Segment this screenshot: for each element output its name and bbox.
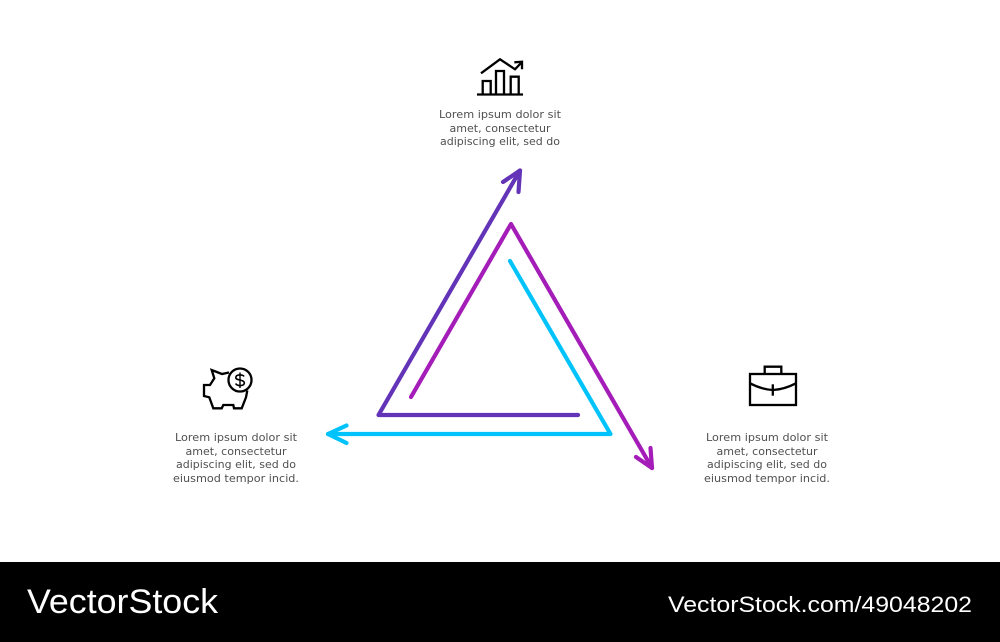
text block: left: Lorem ipsum dolor sit xyxy=(175,432,297,444)
text block: right: amet, consectetur xyxy=(716,446,818,458)
text block: top xyxy=(439,109,561,148)
icon: piggy bank with dollar coin xyxy=(204,368,252,408)
text block: right xyxy=(704,432,830,485)
arrow: magenta, pointing down right xyxy=(411,224,652,468)
footer band xyxy=(0,562,1000,642)
text block: left: amet, consectetur xyxy=(186,446,287,458)
arrow: violet, pointing up xyxy=(378,170,578,415)
icon: bar chart with rising arrow xyxy=(477,59,523,94)
footer logo text: VectorStock xyxy=(27,583,219,621)
text block: left: eiusmod tempor incid. xyxy=(173,473,299,485)
text block: right: Lorem ipsum dolor sit xyxy=(706,432,828,444)
arrow: cyan, pointing left xyxy=(328,261,610,443)
text block: right: eiusmod tempor incid. xyxy=(704,473,830,485)
icon: briefcase xyxy=(750,367,796,405)
text block: top: Lorem ipsum dolor sit xyxy=(439,109,561,121)
text block: top: adipiscing elit, sed do xyxy=(440,136,560,148)
diagram: triangle of three arrows xyxy=(328,170,652,468)
text block: right: adipiscing elit, sed do xyxy=(707,459,827,471)
text block: left xyxy=(173,432,299,485)
footer image id text: VectorStock.com/49048202 xyxy=(668,592,972,617)
text block: left: adipiscing elit, sed do xyxy=(176,459,296,471)
text block: top: amet, consectetur xyxy=(450,123,551,135)
